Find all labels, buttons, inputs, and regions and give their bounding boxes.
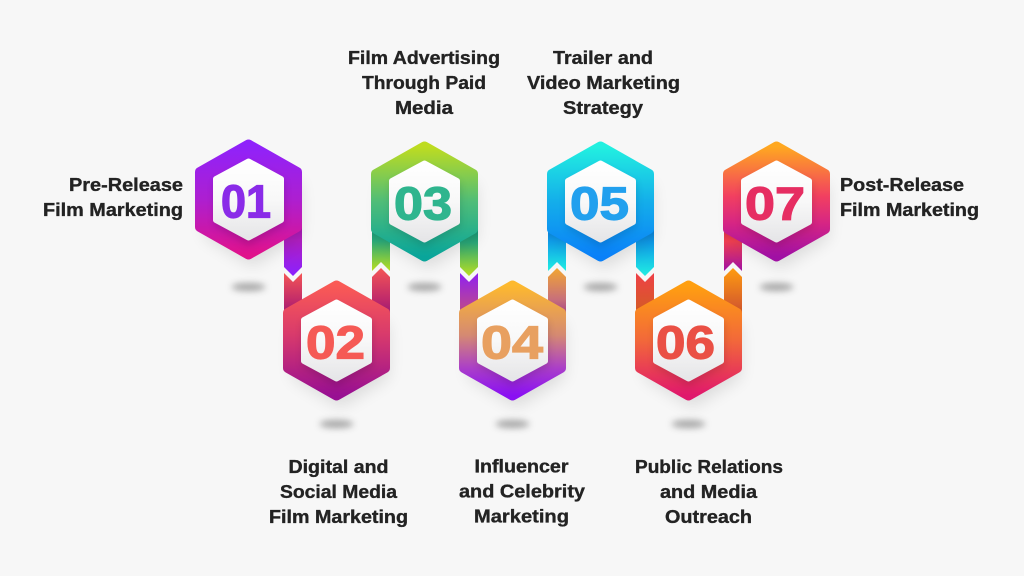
label: step 03	[348, 48, 500, 118]
ribbon: 06 to 07	[724, 225, 742, 320]
number 05: 05	[570, 178, 629, 230]
label: step 07: Post-Release	[840, 175, 964, 195]
label: step 04: Influencer	[474, 456, 568, 476]
hexagon 04	[464, 286, 564, 408]
label: step 06: Public Relations	[635, 457, 783, 477]
label: step 04: Marketing	[474, 506, 569, 526]
label: step 01: Pre-Release	[69, 175, 183, 195]
hexagon 06	[640, 286, 740, 408]
label: step 04	[459, 456, 585, 526]
label: step 06: and Media	[660, 482, 758, 502]
hexagon 05	[552, 146, 652, 268]
label: step 01	[43, 175, 183, 220]
label: step 05: Video Marketing	[527, 73, 680, 93]
label: step 05: Trailer and	[553, 48, 653, 68]
number 06: 06	[656, 316, 715, 368]
ribbon: 05 to 06	[636, 225, 654, 320]
label: step 02	[269, 457, 408, 527]
label: step 02: Digital and	[288, 457, 388, 477]
label: step 04: and Celebrity	[459, 482, 585, 502]
ribbon: 04 to 05	[548, 225, 566, 320]
ribbon: 03 to 04	[460, 225, 478, 320]
label: step 05	[527, 48, 680, 118]
label: step 01: Film Marketing	[43, 200, 183, 220]
label: step 06	[635, 457, 783, 527]
label: step 02: Social Media	[280, 482, 398, 502]
label: step 05: Strategy	[563, 98, 643, 118]
number 03: 03	[394, 178, 452, 230]
number 04: 04	[481, 316, 543, 368]
floor shadows	[232, 283, 794, 428]
connector ribbons	[284, 225, 742, 320]
hexagon 03	[376, 146, 476, 268]
number 01: 01	[221, 176, 271, 228]
hexagon 01	[200, 144, 300, 266]
label: step 02: Film Marketing	[269, 507, 408, 527]
label: step 03: Through Paid	[362, 73, 486, 93]
ribbon: 02 to 03	[372, 225, 390, 320]
hexagon 07	[728, 146, 828, 268]
label: step 07	[840, 175, 979, 220]
hexagon 02	[288, 286, 388, 408]
label: step 03: Media	[395, 98, 454, 118]
label: step 06: Outreach	[665, 507, 752, 527]
number 07: 07	[745, 178, 805, 230]
ribbon: 01 to 02	[284, 225, 302, 320]
number 02: 02	[306, 316, 365, 368]
label: step 07: Film Marketing	[840, 200, 979, 220]
label: step 03: Film Advertising	[348, 48, 500, 68]
